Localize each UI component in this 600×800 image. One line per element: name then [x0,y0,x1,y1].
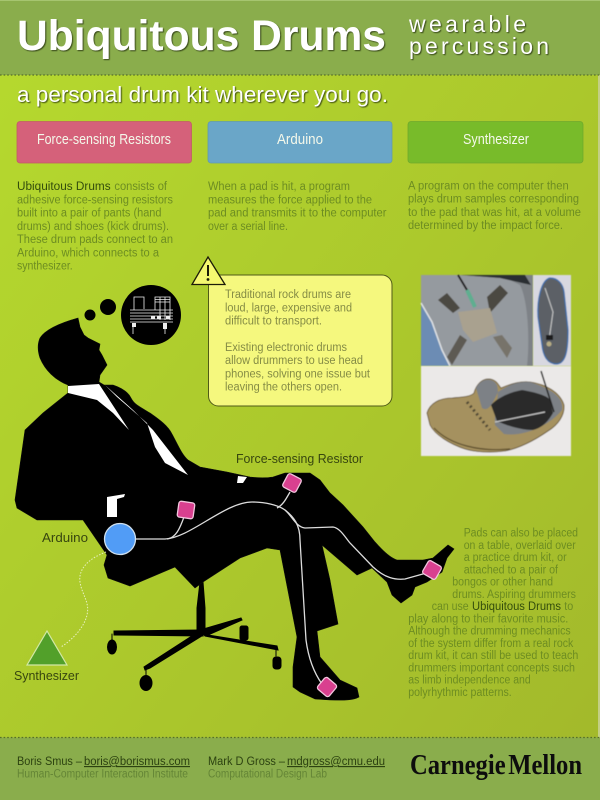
wires [120,492,430,684]
panel: arduino button: Arduino [277,131,323,148]
callout: drum problems: Traditional rock drums are [225,289,351,301]
footer: mark gross credit: Computational Design Lab [208,768,327,780]
text block: other uses: play along to their favorite music. [408,613,568,625]
text block: other uses: drum kit, it can still be used to teach [408,650,578,662]
text block: arduino description: When a pad is hit, a program [208,181,350,193]
text block: arduino description: over a serial line. [208,221,288,233]
text block: other uses: of the system differ from a real rock [408,638,574,650]
text block: force-sensing resistors description: Ubiquitous Drums [17,181,111,193]
text block: other uses: drummers important concepts such [408,662,575,674]
callout: drum problems: loud, large, expensive and [225,302,352,314]
text block: other uses: attached to a pair of [464,564,559,576]
footer: boris smus credit: boris@borismus.com [84,756,190,768]
header band [0,0,600,75]
text block: other uses: Ubiquitous Drums [472,601,561,613]
text block: other uses: as limb independence and [408,674,531,686]
text block: other uses: Pads can also be placed [464,528,578,540]
text block: arduino description: measures the force applied to the [208,194,372,206]
text block: synthesizer description: determined by the impact force. [408,220,563,232]
shirt collar and tie [68,384,247,517]
text block: arduino description [208,181,387,233]
text block: other uses: polyrhythmic patterns. [408,687,512,699]
callout: drum problems: allow drummers to use head [225,355,363,367]
photo: boot with sensor [421,366,571,456]
footer: mark gross credit: mdgross@cmu.edu [287,756,385,768]
panel: synthesizer button [408,122,583,163]
text block: other uses: a practice drum kit, or [464,552,567,564]
text block: force-sensing resistors description: built into a pair of pants (hand [17,208,162,220]
title: Ubiquitous Drums [17,12,386,60]
text block: force-sensing resistors description: consists of [114,181,168,193]
subtitle [408,11,549,59]
photo: pad taped to pants [421,275,533,366]
icon: thought bubbles with drum notation [84,285,181,345]
panel: force-sensing resistors button [17,122,192,163]
text block: other uses: on a table, overlaid over [464,540,576,552]
subtitle: percussion [409,33,549,59]
chair [108,582,281,690]
panel: force-sensing resistors button: Force-sensing Resistors [37,131,171,148]
subtitle: wearable [408,11,526,37]
text block: synthesizer description: plays drum samples corresponding [408,194,579,206]
text block: synthesizer description: to the pad that was hit, at a volume [408,207,581,219]
text block: arduino description: pad and transmits it to the computer [208,208,387,220]
figure: man in a suit on an office chair [15,318,454,700]
icon: synthesizer triangle [27,631,67,665]
footer: boris smus credit: Human-Computer Interaction Institute [17,768,188,780]
footer: mark gross credit: Mark D Gross – [208,756,286,768]
footer: boris smus credit: Boris Smus – [17,756,83,768]
text block: synthesizer description: A program on the computer then [408,180,569,192]
text block: other uses: Although the drumming mechanics [408,626,571,638]
arduino node [104,524,136,554]
text block: other uses: to [564,601,573,613]
photos: sensor in pants and shoes [421,275,571,456]
label: force-sensing resistor: Force-sensing Resistor [236,451,364,466]
text block: force-sensing resistors description: synthesizer. [17,260,73,272]
text block: force-sensing resistors description: Arduino, which connects to a [17,247,160,259]
photo: insole with sensor [533,275,571,366]
label: arduino: Arduino [42,530,88,545]
callout: drum problems [208,275,392,406]
footer: boris smus credit [17,756,190,780]
arrow: dotted line from arduino to synthesizer [61,552,106,647]
pressure pads [177,473,442,698]
callout: drum problems: phones, solving one issue but [225,368,371,380]
logo: carnegie mellon wordmark: Carnegie Mellon [410,750,582,781]
text block: other uses: drums. Aspiring drummers [452,589,576,601]
callout: drum problems: Existing electronic drums [225,342,347,354]
footer band [0,738,600,800]
text block: force-sensing resistors description: adhesive force-sensing resistors [17,194,173,206]
text block: synthesizer description [408,180,581,232]
footer: mark gross credit [208,756,385,780]
callout: drum problems: leaving the others open. [225,382,342,394]
text block: force-sensing resistors description: These drum pads connect to an [17,234,173,246]
panel: synthesizer button: Synthesizer [463,131,529,148]
silhouette body [15,318,454,700]
text block: other uses [408,528,578,699]
text block: force-sensing resistors description [17,181,173,272]
icon: warning triangle [192,257,225,284]
text block: other uses: can use [432,601,469,613]
text block: force-sensing resistors description: drums) and shoes (kick drums). [17,221,169,233]
text block: other uses: bongos or other hand [452,577,553,589]
panel: arduino button [208,122,392,163]
tagline: a personal drum kit wherever you go. [17,82,388,107]
label: synthesizer: Synthesizer [14,668,80,683]
callout: drum problems: difficult to transport. [225,316,322,328]
